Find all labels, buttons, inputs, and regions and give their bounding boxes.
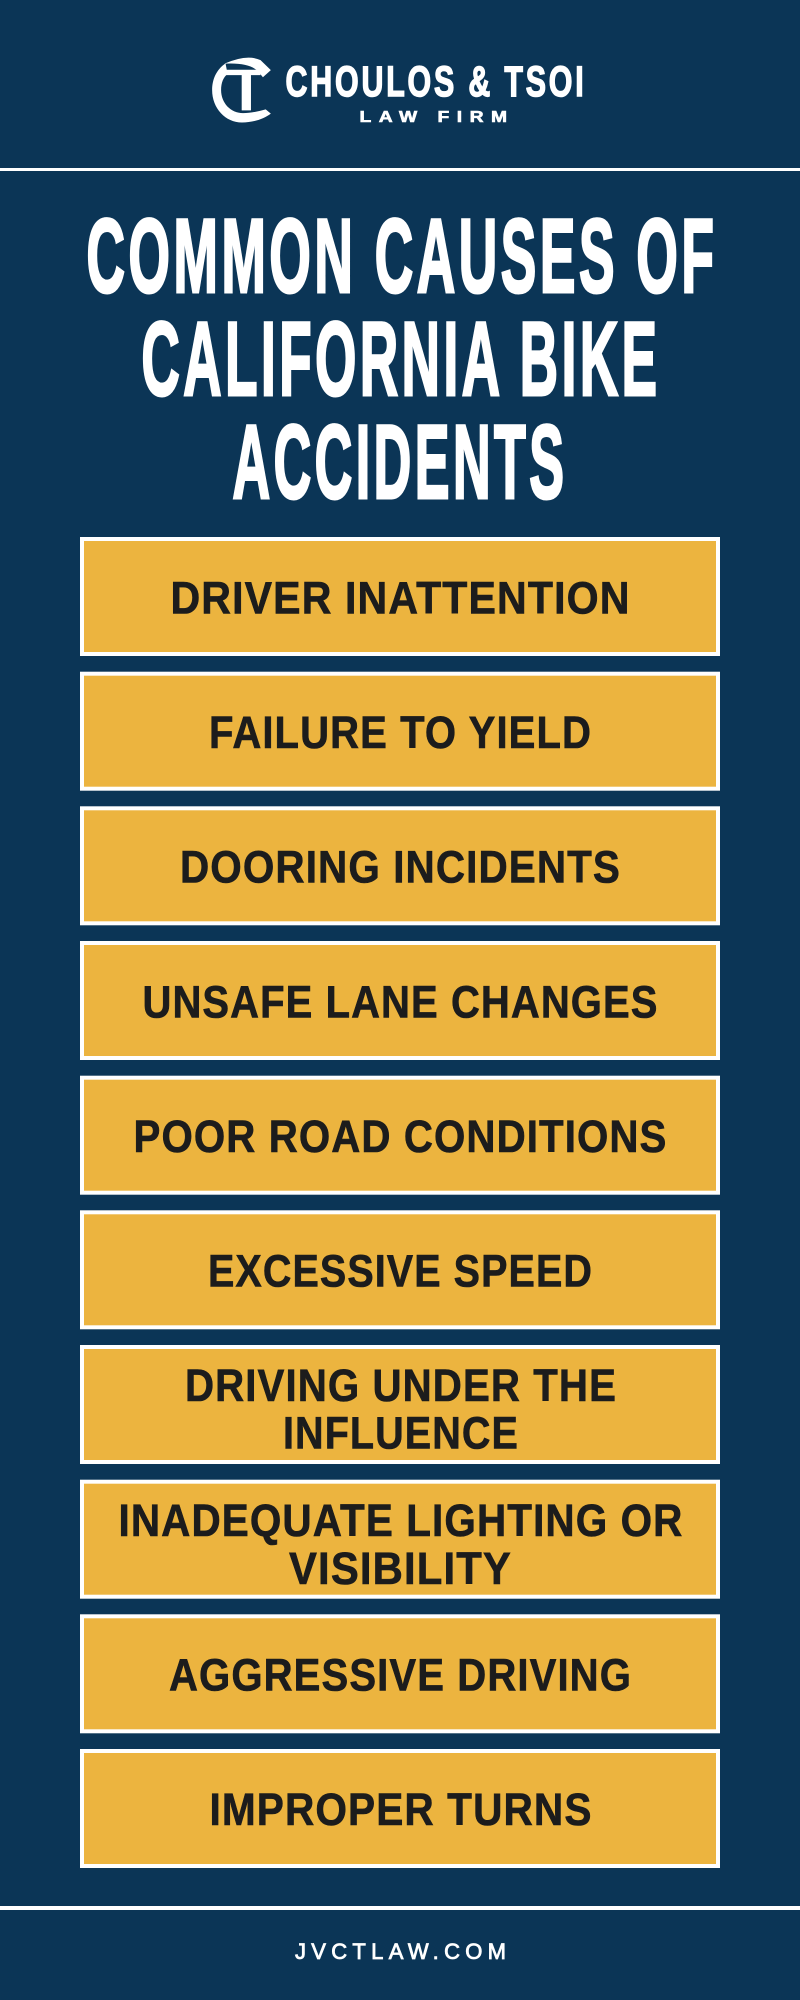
panel: driver inattention: DRIVER INATTENTION [170, 572, 630, 623]
panel: dooring incidents [82, 808, 718, 923]
panel: inadequate lighting or visibility [82, 1482, 718, 1597]
panel: failure to yield [82, 674, 718, 789]
panel: failure to yield: FAILURE TO YIELD [209, 707, 592, 758]
panel: aggressive driving: AGGRESSIVE DRIVING [169, 1650, 632, 1701]
panel: driving under the influence [82, 1347, 718, 1462]
panel: aggressive driving [82, 1616, 718, 1731]
panel: poor road conditions [82, 1078, 718, 1193]
panel: inadequate lighting or visibility: VISIBILITY [289, 1543, 512, 1594]
panel: poor road conditions: POOR ROAD CONDITIONS [134, 1111, 668, 1162]
panel: unsafe lane changes [82, 943, 718, 1058]
panel: dooring incidents: DOORING INCIDENTS [180, 842, 621, 893]
panel: driver inattention [82, 539, 718, 654]
panel: inadequate lighting or visibility: INADEQUATE LIGHTING OR [118, 1495, 684, 1546]
panel: unsafe lane changes: UNSAFE LANE CHANGES [142, 976, 658, 1027]
panel: improper turns [82, 1751, 718, 1866]
panel: driving under the influence: DRIVING UNDER THE [185, 1360, 617, 1411]
footer website: JVCTLAW.COM [295, 1939, 506, 1964]
panel: driving under the influence: INFLUENCE [283, 1408, 519, 1459]
title [86, 198, 718, 521]
panel: excessive speed: EXCESSIVE SPEED [208, 1246, 593, 1297]
icon: CT monogram [212, 58, 271, 123]
header logo [212, 58, 586, 126]
logo subtitle: LAW FIRM [360, 109, 514, 126]
logo wordmark: CHOULOS & TSOI [286, 58, 586, 106]
panel: excessive speed [82, 1212, 718, 1327]
panel: improper turns: IMPROPER TURNS [210, 1784, 592, 1835]
